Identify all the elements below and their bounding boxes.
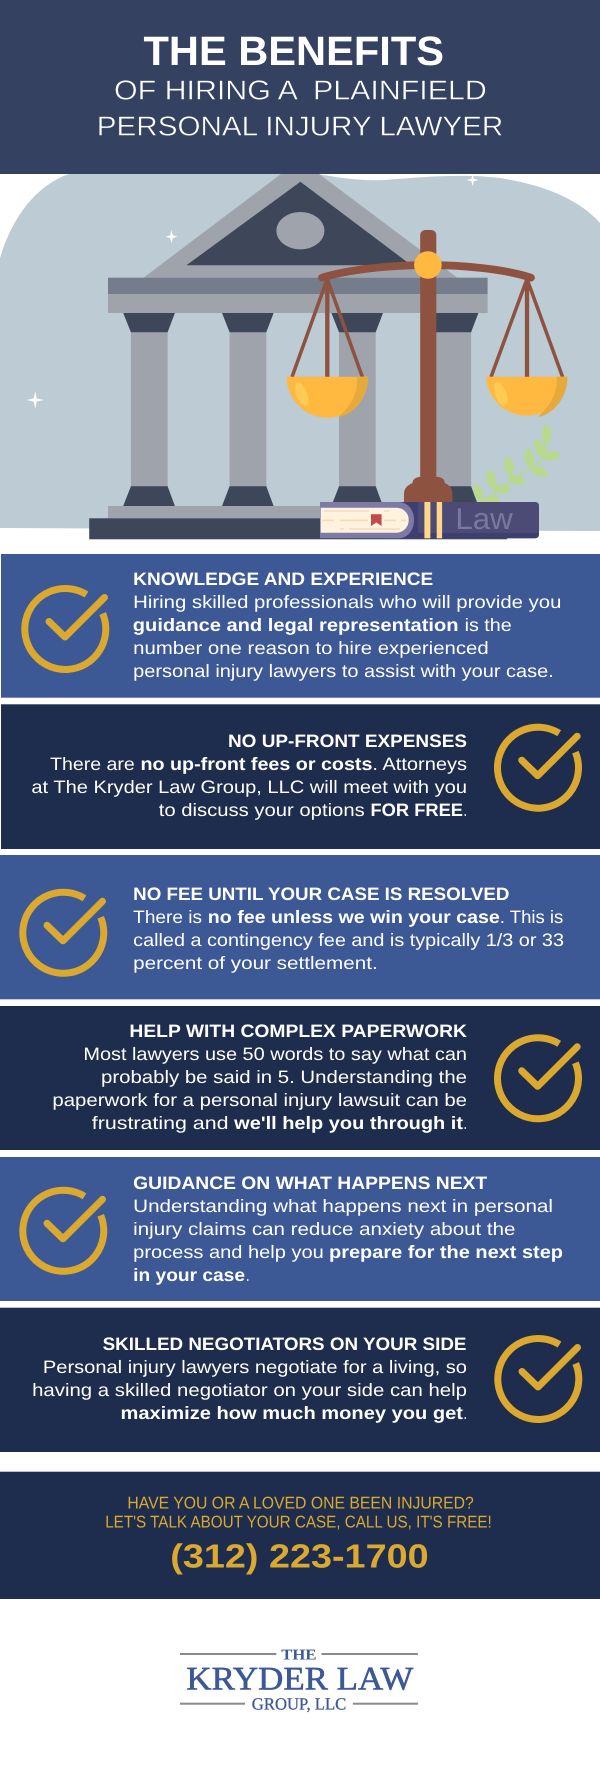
body text: . Attorneys — [372, 754, 467, 774]
heading: HELP WITH COMPLEX PAPERWORK — [129, 1021, 467, 1041]
title: THE BENEFITS — [144, 28, 444, 74]
stripes — [424, 502, 430, 538]
callout text: HAVE YOU OR A LOVED ONE BEEN INJURED? — [127, 1494, 474, 1513]
body text: called a contingency fee and is typically 1/3 or 33 — [133, 930, 564, 950]
subtitle — [97, 74, 503, 141]
body text: FOR FREE — [370, 800, 463, 820]
body text: injury claims can reduce anxiety about the — [133, 1219, 515, 1239]
body text: . — [464, 800, 467, 820]
panel: knowledge and experience — [1, 554, 600, 698]
sparkle stars — [26, 174, 478, 409]
left strings — [292, 279, 362, 377]
logo: The Kryder Law Group — [180, 1647, 418, 1714]
beam — [322, 265, 531, 278]
body text: frustrating and — [92, 1113, 228, 1133]
book label: Law — [455, 503, 513, 536]
body text: process and help you — [133, 1242, 324, 1262]
illustration: courthouse and scales — [0, 174, 600, 539]
body text: we'll help you through it — [233, 1113, 463, 1133]
panel: no up-front expenses — [1, 704, 600, 849]
body text: no up-front fees or costs — [140, 754, 372, 774]
body text: There are — [50, 754, 135, 774]
body text: percent of your settlement. — [133, 953, 378, 973]
background blob — [0, 174, 600, 531]
body text: paperwork for a personal injury lawsuit can be — [52, 1090, 467, 1110]
body text: having a skilled negotiator on your side can help — [32, 1380, 467, 1400]
heading: NO UP-FRONT EXPENSES — [228, 731, 467, 751]
columns — [123, 313, 478, 506]
body text — [133, 907, 564, 973]
bookmark — [371, 514, 382, 526]
body text — [133, 592, 561, 681]
steps — [108, 506, 408, 518]
left pan — [287, 377, 368, 418]
scales of justice — [287, 230, 568, 503]
body text: . — [464, 1113, 467, 1133]
right pan — [486, 377, 568, 417]
body text: Understanding what happens next in personal — [133, 1196, 553, 1216]
body text — [133, 1196, 563, 1285]
courthouse — [89, 174, 507, 539]
body text — [31, 754, 467, 820]
body text: prepare for the next step — [329, 1242, 563, 1262]
icon: check circle — [23, 892, 104, 973]
logo: The Kryder Law Group: GROUP, LLC — [252, 1695, 346, 1714]
right strings — [491, 279, 563, 377]
panel: no fee until resolved — [0, 855, 600, 999]
logo: The Kryder Law Group: THE — [281, 1647, 316, 1663]
roof — [144, 174, 457, 278]
body text: Most lawyers use 50 words to say what can — [83, 1044, 467, 1064]
entablature — [108, 278, 488, 294]
body text: number one reason to hire experienced — [133, 638, 489, 658]
body text: to discuss your options — [159, 800, 365, 820]
plant sprig — [472, 424, 560, 504]
law book — [320, 502, 539, 538]
icon: check circle — [498, 1338, 579, 1419]
logo: The Kryder Law Group: KRYDER LAW — [186, 1661, 414, 1697]
callout text: LET'S TALK ABOUT YOUR CASE, CALL US, IT'S FREE! — [105, 1513, 492, 1532]
body text: There is — [133, 907, 202, 927]
body text: maximize how much money you get — [120, 1403, 463, 1423]
heading: SKILLED NEGOTIATORS ON YOUR SIDE — [103, 1334, 466, 1354]
heading: NO FEE UNTIL YOUR CASE IS RESOLVED — [133, 884, 509, 904]
call to action banner — [0, 1472, 600, 1599]
body text: guidance and legal representation — [133, 615, 459, 635]
body text: . — [464, 1403, 467, 1423]
pivot — [414, 251, 442, 279]
body text: is the — [465, 615, 512, 635]
body text: Hiring skilled professionals who will provide you — [133, 592, 561, 612]
body text — [52, 1044, 467, 1133]
heading: GUIDANCE ON WHAT HAPPENS NEXT — [133, 1173, 487, 1193]
icon: check circle — [25, 588, 106, 669]
body text: . This is — [500, 907, 563, 927]
panel: what happens next — [0, 1157, 600, 1301]
body text: at The Kryder Law Group, LLC will meet with you — [31, 777, 467, 797]
phone number: (312) 223-1700 — [170, 1538, 429, 1575]
body text: . — [246, 1265, 250, 1285]
body text: no fee unless we win your case — [208, 907, 500, 927]
icon: check circle — [23, 1190, 104, 1271]
panel: skilled negotiators — [0, 1308, 600, 1452]
header banner — [0, 0, 600, 174]
body text: Personal injury lawyers negotiate for a living, so — [43, 1357, 467, 1377]
subtitle: PERSONAL INJURY LAWYER — [97, 110, 503, 141]
icon: check circle — [497, 727, 578, 808]
subtitle: OF HIRING A PLAINFIELD — [114, 74, 487, 105]
body text: in your case — [133, 1265, 245, 1285]
callout text — [105, 1494, 492, 1532]
pole — [420, 230, 436, 490]
body text — [32, 1357, 467, 1423]
panel: complex paperwork — [0, 1006, 600, 1150]
icon: check circle — [497, 1038, 578, 1119]
body text: personal injury lawyers to assist with your case. — [133, 661, 554, 681]
body text: probably be said in 5. Understanding the — [101, 1067, 467, 1087]
heading: KNOWLEDGE AND EXPERIENCE — [133, 569, 433, 589]
